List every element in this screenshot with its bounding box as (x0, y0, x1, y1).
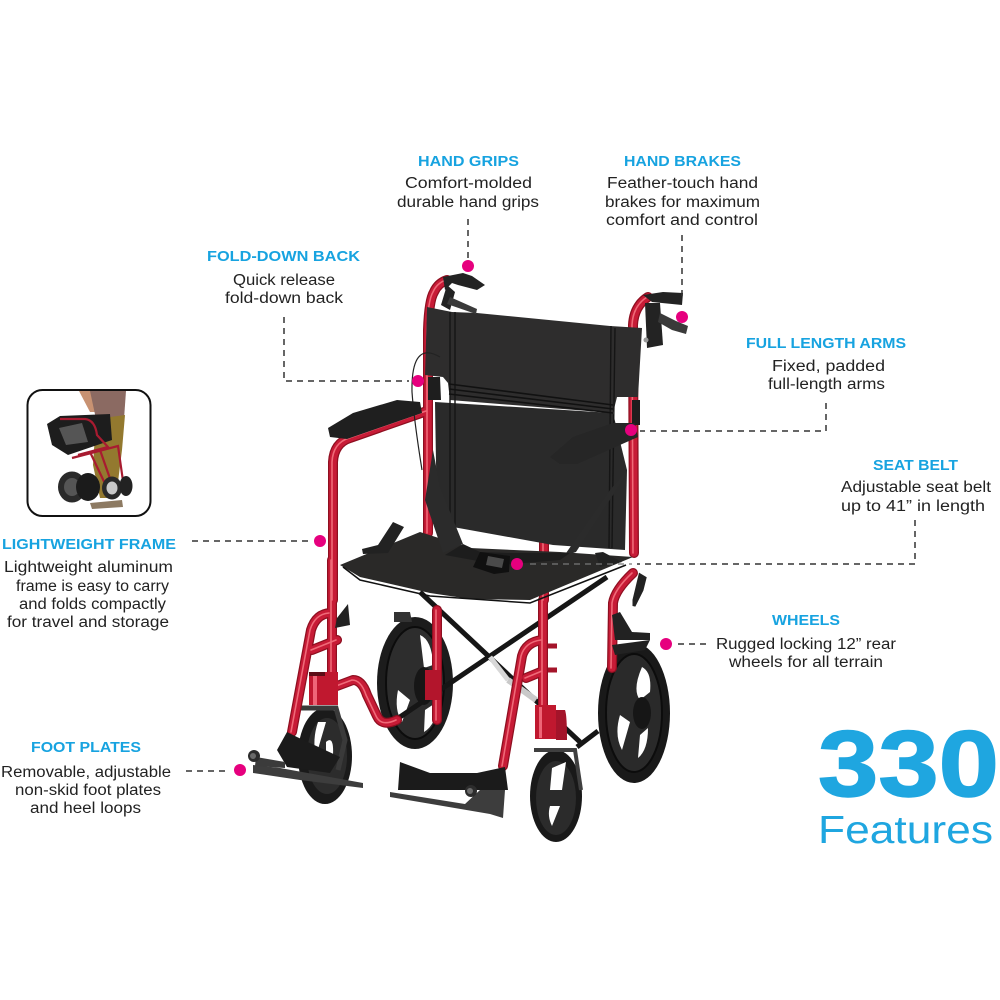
right armrest (550, 423, 638, 464)
callout: hand grips: durable hand grips (397, 194, 539, 211)
belt buckle (473, 552, 510, 574)
backrest upper band (425, 307, 642, 413)
callout: foot plates (1, 739, 246, 817)
callout: foot plates: non-skid foot plates (15, 782, 161, 799)
callout: hand brakes: HAND BRAKES (624, 153, 741, 170)
backrest (412, 307, 642, 550)
standing person (79, 391, 126, 509)
callout: wheels: WHEELS (772, 612, 840, 629)
headline: 330 Features: 330 (818, 711, 999, 816)
callout: full length arms: FULL LENGTH ARMS (746, 335, 906, 352)
callout: seat belt: up to 41” in length (841, 498, 985, 515)
callout: lightweight frame: frame is easy to carry (16, 578, 169, 595)
hand grip left (441, 273, 485, 314)
rear left wheel (377, 617, 453, 749)
left foot plate (248, 732, 363, 788)
callout: hand brakes: Feather-touch hand (607, 175, 758, 192)
callout: full length arms: full-length arms (768, 376, 885, 393)
callout: hand grips: HAND GRIPS (418, 153, 519, 170)
callout: hand grips: Comfort-molded (405, 175, 532, 192)
callout: full length arms: Fixed, padded (772, 358, 885, 375)
callout: fold-down back: fold-down back (225, 290, 343, 307)
side seat strap (362, 522, 404, 554)
callout: foot plates: and heel loops (30, 800, 141, 817)
folded chair (47, 414, 132, 502)
red frame (291, 280, 648, 766)
backrest lower panel (435, 402, 627, 550)
callout: hand grips (397, 153, 539, 272)
callout: fold-down back: FOLD-DOWN BACK (207, 248, 360, 265)
callout: lightweight frame: LIGHTWEIGHT FRAME (2, 536, 176, 553)
callout: hand brakes: brakes for maximum (605, 194, 760, 211)
callout: lightweight frame: and folds compactly (19, 596, 166, 613)
callout: wheels: Rugged locking 12” rear (716, 636, 896, 653)
callout: lightweight frame (2, 535, 326, 631)
left armrest (328, 400, 422, 439)
callout: full length arms (625, 335, 906, 436)
seat belt (425, 450, 627, 574)
callout: foot plates: Removable, adjustable (1, 764, 171, 781)
callout: fold-down back: Quick release (233, 272, 335, 289)
wheelchair (248, 273, 688, 842)
cross brace (397, 577, 607, 747)
callout: fold-down back (207, 248, 424, 387)
callout: seat belt: SEAT BELT (873, 457, 958, 474)
callout: foot plates: FOOT PLATES (31, 739, 141, 756)
callout: lightweight frame: Lightweight aluminum (4, 559, 173, 576)
headline: 330 Features: Features (818, 809, 993, 852)
frame collars (309, 646, 567, 740)
seat (340, 522, 633, 603)
callout: lightweight frame: for travel and storage (7, 614, 169, 631)
front left caster (298, 708, 352, 804)
callout: seat belt: Adjustable seat belt (841, 479, 992, 496)
right foot plate (390, 762, 508, 818)
front right caster (530, 750, 582, 842)
callout: seat belt (511, 457, 992, 570)
rear right wheel (598, 643, 670, 783)
hand brake right (643, 292, 688, 348)
callout: wheels (660, 612, 896, 671)
callout: hand brakes: comfort and control (606, 212, 758, 229)
headline: 330 Features (818, 711, 999, 852)
callout: wheels: wheels for all terrain (728, 654, 883, 671)
folded chair inset (28, 390, 150, 516)
callout: hand brakes (605, 153, 760, 323)
folding joint brackets (335, 575, 650, 655)
